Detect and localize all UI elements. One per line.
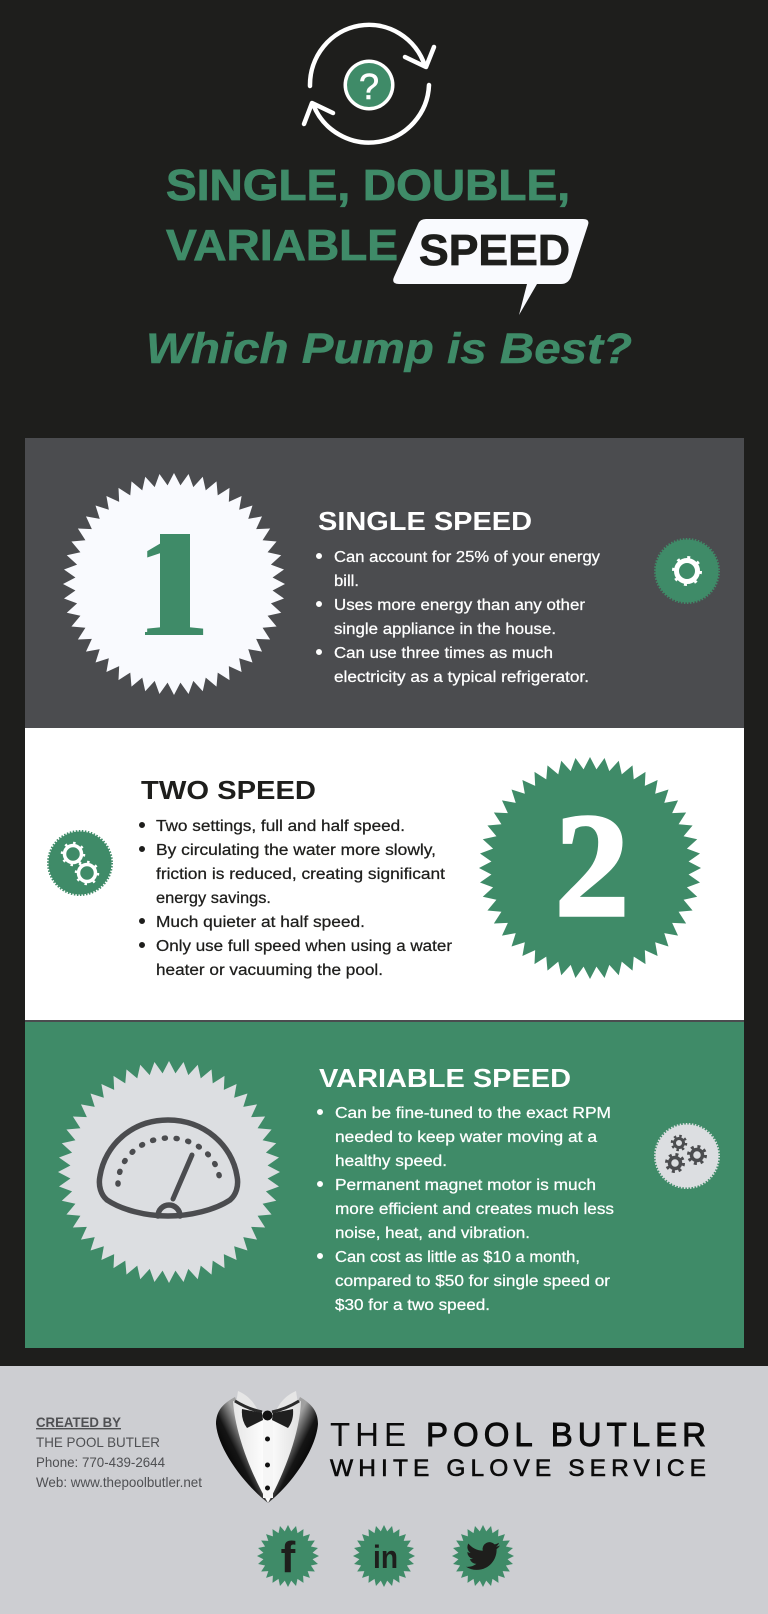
bullet list: noise, heat, and vibration. (335, 1225, 530, 1242)
heading: SINGLE SPEED (318, 506, 532, 536)
footer (0, 1366, 768, 1614)
logo text: POOL BUTLER (426, 1416, 706, 1453)
bullet list: electricity as a typical refrigerator. (334, 669, 589, 686)
bullet list: bill. (334, 573, 359, 590)
bullet list: Only use full speed when using a water (156, 938, 452, 955)
icon: linkedin: in (373, 1539, 398, 1575)
bullet list: friction is reduced, creating significant (156, 866, 446, 883)
footer background (0, 1366, 768, 1614)
starburst badge: number 1: 1 (135, 500, 211, 668)
credits text: CREATED BY (36, 1414, 122, 1430)
heading: TWO SPEED (141, 775, 316, 805)
starburst badge: number 2 (479, 757, 701, 979)
starburst badge: number 2: 2 (555, 784, 629, 948)
icon: three gears (656, 1124, 718, 1188)
icon: facebook: f (281, 1533, 296, 1582)
bullet list: Can use three times as much (334, 645, 553, 662)
icon: circular arrows with question mark (304, 25, 434, 143)
bullet list: Permanent magnet motor is much (335, 1177, 596, 1194)
title line 1: SINGLE, DOUBLE, (166, 161, 570, 210)
credits text (36, 1414, 202, 1490)
bullet list: more efficient and creates much less (335, 1201, 614, 1218)
starburst badge: gauge (58, 1061, 280, 1283)
header (146, 25, 632, 373)
speech bubble: speed (393, 219, 588, 315)
panel: single speed (25, 438, 744, 728)
bullet list: energy savings. (156, 890, 271, 907)
panel: variable speed (25, 1022, 744, 1348)
bullet list (318, 1105, 614, 1314)
bullet list: Can account for 25% of your energy (334, 549, 600, 566)
icon: linkedin (353, 1525, 415, 1587)
bullet list: Can be fine-tuned to the exact RPM (335, 1105, 611, 1122)
logo text: WHITE GLOVE SERVICE (330, 1455, 706, 1482)
bullet list: Uses more energy than any other (334, 597, 585, 614)
icon: two gears (48, 832, 112, 894)
panel: two speed (25, 728, 744, 1020)
bullet list: heater or vacuuming the pool. (156, 962, 383, 979)
bullet list (140, 818, 452, 979)
bullet list: Can cost as little as $10 a month, (335, 1249, 580, 1266)
icon: speedometer (99, 1120, 238, 1216)
title line 2: VARIABLE (166, 221, 398, 270)
subtitle: Which Pump is Best? (146, 325, 632, 373)
icon: circular arrows with question mark: ? (359, 66, 379, 107)
bullet list (316, 549, 600, 686)
bullet list: $30 for a two speed. (335, 1297, 490, 1314)
bullet list: By circulating the water more slowly, (156, 842, 436, 859)
heading: VARIABLE SPEED (319, 1063, 571, 1093)
icon: facebook (257, 1525, 319, 1587)
icon: single gear (656, 540, 718, 602)
speech bubble: speed: SPEED (419, 226, 570, 275)
panel background (25, 728, 744, 1020)
icon: twitter (452, 1525, 514, 1587)
starburst badge: number 1 (63, 473, 285, 695)
panel background (25, 438, 744, 728)
divider line (25, 1020, 744, 1022)
panel background (25, 1022, 744, 1348)
bullet list: healthy speed. (335, 1153, 447, 1170)
bullet list: Two settings, full and half speed. (156, 818, 405, 835)
bullet list: needed to keep water moving at a (335, 1129, 597, 1146)
bullet list: compared to $50 for single speed or (335, 1273, 610, 1290)
bullet list: single appliance in the house. (334, 621, 556, 638)
logo text: THE (330, 1416, 406, 1453)
bullet list: Much quieter at half speed. (156, 914, 365, 931)
logo: tuxedo (216, 1391, 318, 1503)
credits text: Phone: 770-439-2644 (36, 1454, 165, 1470)
credits text: Web: www.thepoolbutler.net (36, 1474, 202, 1490)
logo text (330, 1416, 706, 1482)
credits text: THE POOL BUTLER (36, 1434, 160, 1450)
